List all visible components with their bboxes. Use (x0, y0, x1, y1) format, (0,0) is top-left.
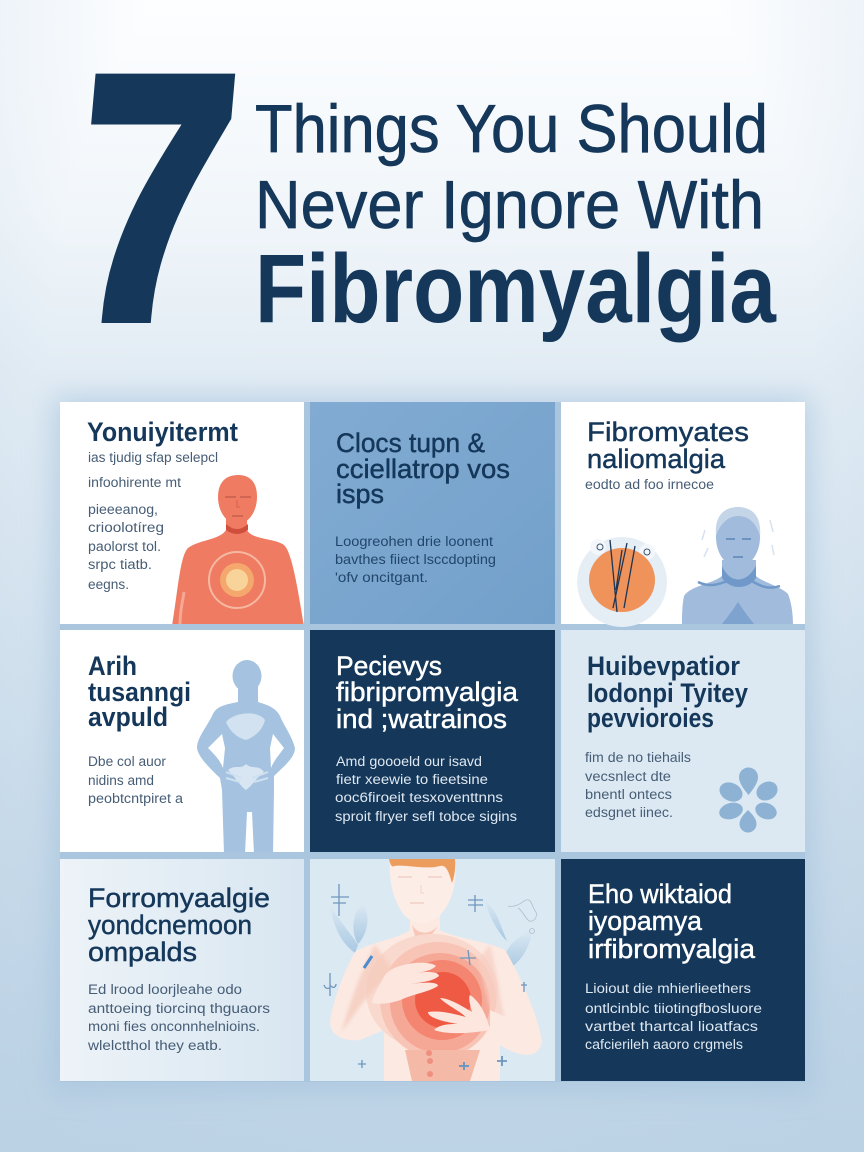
panel text: eegns. (88, 577, 129, 592)
panel text: edsgnet iinec. (585, 805, 673, 820)
panel text: srpc tiatb. (88, 557, 152, 572)
panel: head and nerve illustration (561, 402, 805, 627)
title line one: Things You Should (255, 91, 768, 167)
panel heading: yondcnemoon (88, 910, 252, 940)
panel text (88, 450, 218, 592)
panel heading (336, 428, 510, 509)
panel text: ias tjudig sfap selepcl (88, 450, 218, 465)
panel text: vecsnlect dte (585, 769, 671, 784)
icon: body (330, 915, 542, 1081)
panel heading: tusanngi (88, 677, 191, 707)
panel text: paolorst tol. (88, 539, 161, 554)
panel heading: Huibevpatior (587, 651, 740, 681)
panel heading: Clocs tupn & (336, 428, 485, 458)
panel heading (588, 879, 756, 964)
panel: light card with flower icon (561, 630, 805, 852)
big number 7: 7 (61, 6, 249, 391)
panel text: nidins amd (88, 773, 154, 788)
panel heading: Eho wiktaiod (588, 879, 732, 909)
panel heading: irfibromyalgia (588, 934, 756, 964)
panel text: pieeeanog, (88, 502, 158, 517)
panel heading: Forromyaalgie (88, 883, 270, 913)
panel heading: fibripromyalgia (336, 677, 519, 707)
panel text: anttoeing tiorcinq thguaors (88, 1001, 270, 1016)
panel heading: ompalds (88, 937, 197, 967)
panel text: wlelctthol they eatb. (87, 1038, 222, 1053)
icon: coral body with glowing chest (172, 475, 304, 626)
panel text (88, 754, 184, 806)
icon: hair (389, 859, 455, 883)
panel text: cafcierileh aaoro crgmels (585, 1037, 743, 1052)
icon: leaf shapes (332, 907, 530, 966)
panel text (585, 981, 762, 1052)
panel text: bavthes fiiect lsccdopting (335, 552, 496, 567)
panel heading: naliomalgia (587, 444, 726, 474)
panel text: peobtcntpiret a (88, 791, 184, 806)
panel text (335, 754, 517, 824)
panel heading (587, 417, 749, 474)
panel text: Loogreohen drie loonent (335, 534, 493, 549)
icon: blue figure head and shoulders (682, 507, 793, 626)
chart: concentric red pain rings (366, 934, 498, 1081)
panel text: Dbe col auor (88, 754, 167, 769)
panel heading: ind ;watrainos (336, 704, 507, 734)
panel text (87, 982, 270, 1053)
panel: abdominal body silhouette (60, 630, 304, 854)
panel heading: Pecievys (336, 651, 442, 681)
panel text: Amd goooeld our isavd (336, 754, 482, 769)
panel text: Ed lrood loorjleahe odo (88, 982, 242, 997)
panel text: crioolotíreg (88, 520, 164, 535)
panel: navy text card lower right (561, 859, 805, 1081)
panel: navy text card (310, 630, 555, 852)
panel heading (587, 651, 748, 733)
panel text: bnentl ontecs (585, 787, 672, 802)
panel heading (88, 651, 191, 732)
icon: six petal flower (716, 768, 781, 832)
panel text: eodto ad foo irnecoe (585, 477, 714, 492)
panel heading: isps (336, 479, 384, 509)
panel text: fim de no tiehails (585, 750, 691, 765)
icon: hands (372, 963, 439, 1004)
panel heading: Yonuiyitermt (87, 417, 238, 447)
panel: person holding painful chest (310, 859, 555, 1081)
panel heading: Iodonpi Tyitey (587, 678, 748, 708)
panel text: fietr xeewie to fieetsine (336, 772, 488, 787)
panel: gradient text card (60, 859, 304, 1081)
panel heading (88, 883, 270, 967)
panel heading (336, 651, 519, 734)
icon: orange disc with needles (577, 537, 667, 627)
panel: blue text card (310, 402, 555, 624)
icon: small medical marks (324, 884, 527, 1070)
title (61, 6, 777, 391)
title line three: Fibromyalgia (255, 234, 777, 343)
icon: arm shading (343, 946, 390, 1029)
panel: chest pain figure (60, 402, 304, 626)
panel text: infoohirente mt (88, 475, 181, 490)
panel text (585, 750, 691, 820)
panel heading: cciellatrop vos (336, 454, 510, 484)
panel text: vartbet thartcal lioatfacs (585, 1019, 758, 1034)
panel text: sproit flryer sefl tobce sigins (335, 809, 517, 824)
panel heading: iyopamya (588, 906, 703, 936)
panel text: 'ofv oncitgant. (335, 570, 428, 585)
panel text: ontlcinblc tiiotingfbosluore (585, 1001, 762, 1016)
panel text: moni fies onconnhelnioins. (88, 1019, 260, 1034)
panel heading: pevvioroies (587, 703, 714, 733)
panel text (335, 534, 496, 585)
panel heading: Arih (88, 651, 137, 681)
title line two: Never Ignore With (255, 167, 764, 243)
panel text: ooc6firoeit tesxoventtnns (335, 790, 503, 805)
panel heading: avpuld (88, 702, 168, 732)
panel text: Lioiout die mhierlieethers (585, 981, 751, 996)
icon: silhouette with hands on abdomen (197, 660, 295, 854)
panel heading: Fibromyates (587, 417, 749, 447)
